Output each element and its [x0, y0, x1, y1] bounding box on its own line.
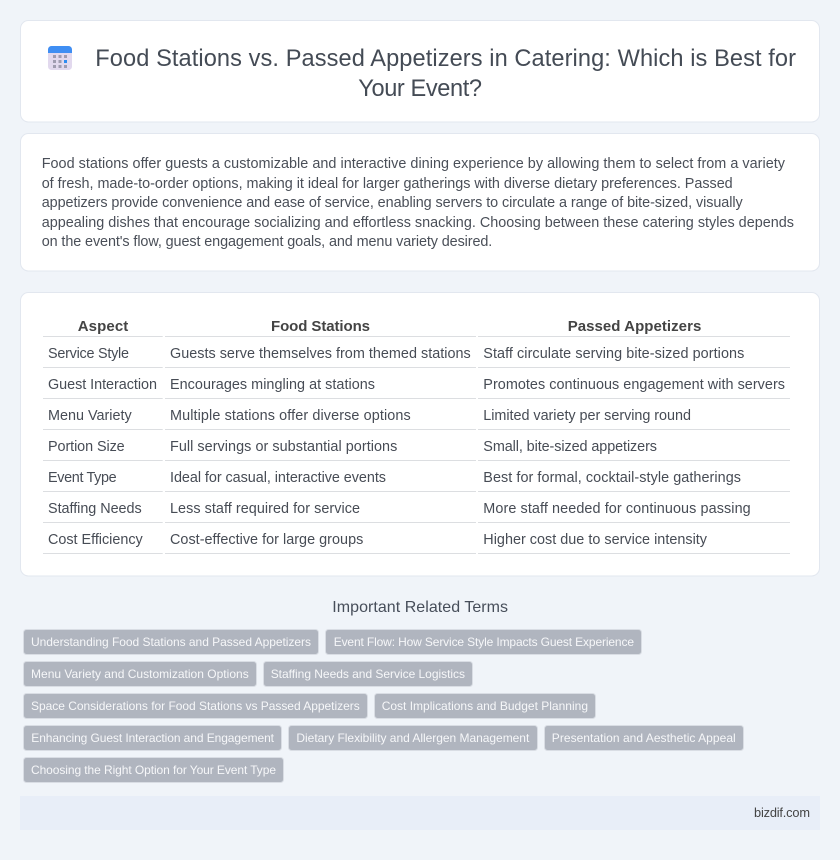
- tag: [24, 726, 282, 750]
- tag: Choosing the Right Option for Your Event Type: [31, 763, 276, 777]
- row: menu variety: Menu Variety: [48, 408, 132, 424]
- tag: [264, 662, 472, 686]
- row: portion size: Full servings or substantial portions: [170, 439, 397, 455]
- text block: summary paragraph: appetizers provide convenience and ease of service, enabling servers to circulate a range of bite-sized, visually: [42, 195, 743, 211]
- tag: Understanding Food Stations and Passed Appetizers: [31, 635, 311, 649]
- row: guest interaction: Encourages mingling at stations: [170, 377, 375, 393]
- heading: related terms: Important Related Terms: [332, 599, 508, 616]
- footer: [20, 796, 820, 830]
- row: menu variety: [48, 408, 691, 424]
- icon: calendar: [48, 46, 72, 70]
- row: staffing needs: More staff needed for continuous passing: [483, 501, 751, 517]
- tag: Staffing Needs and Service Logistics: [271, 667, 465, 681]
- panel: related term tags: [24, 630, 744, 782]
- row: cost efficiency: Cost Efficiency: [48, 532, 143, 548]
- row: event type: Best for formal, cocktail-style gatherings: [483, 470, 741, 486]
- tag: [326, 630, 642, 654]
- text block: summary paragraph: of fresh, made-to-order options, making it ideal for larger gatherings with diverse dietary preferences. Passed: [42, 176, 733, 192]
- row: menu variety: Limited variety per serving round: [483, 408, 691, 424]
- row: service style: [48, 346, 744, 362]
- tag: [24, 758, 284, 782]
- tag: Menu Variety and Customization Options: [31, 667, 249, 681]
- tag: [24, 694, 368, 718]
- tag: Event Flow: How Service Style Impacts Guest Experience: [334, 635, 634, 649]
- table header: [78, 318, 701, 335]
- row: cost efficiency: Higher cost due to service intensity: [483, 532, 708, 548]
- row: portion size: Portion Size: [48, 439, 125, 455]
- tag: [24, 630, 318, 654]
- tag: Dietary Flexibility and Allergen Management: [296, 731, 530, 745]
- row: event type: Ideal for casual, interactive events: [170, 470, 386, 486]
- row: cost efficiency: [48, 532, 708, 548]
- tag: Presentation and Aesthetic Appeal: [552, 731, 736, 745]
- row: staffing needs: [48, 501, 751, 517]
- table header: Passed Appetizers: [568, 318, 701, 335]
- text block: summary paragraph: Food stations offer guests a customizable and interactive dining experience by allowing them to select from a variety: [42, 156, 786, 172]
- text block: summary paragraph: [42, 156, 794, 250]
- tag: Cost Implications and Budget Planning: [382, 699, 588, 713]
- title: [95, 46, 796, 102]
- panel: title card: [20, 20, 820, 122]
- tag: Space Considerations for Food Stations vs Passed Appetizers: [31, 699, 360, 713]
- table header: Food Stations: [271, 318, 370, 335]
- row: portion size: Small, bite-sized appetizers: [483, 439, 657, 455]
- row: guest interaction: [48, 377, 785, 393]
- row: cost efficiency: Cost-effective for large groups: [170, 532, 363, 548]
- tag: Enhancing Guest Interaction and Engagement: [31, 731, 275, 745]
- tag: [374, 694, 596, 718]
- row: guest interaction: Guest Interaction: [48, 377, 157, 393]
- row: event type: [48, 470, 741, 486]
- row: event type: Event Type: [48, 470, 117, 486]
- row: staffing needs: Less staff required for service: [170, 501, 360, 517]
- tag: [24, 662, 256, 686]
- row: service style: Service Style: [48, 346, 129, 362]
- panel: summary text: [20, 134, 820, 271]
- row: menu variety: Multiple stations offer diverse options: [170, 408, 411, 424]
- tag: [288, 726, 538, 750]
- row: staffing needs: Staffing Needs: [48, 501, 142, 517]
- row: guest interaction: Promotes continuous engagement with servers: [483, 377, 785, 393]
- footer: bizdif.com: [754, 805, 810, 820]
- tag: [544, 726, 744, 750]
- text block: summary paragraph: appealing dishes that encourage socializing and effortless snacking. Choosing between these catering styles depends: [42, 215, 794, 231]
- row: service style: Guests serve themselves from themed stations: [170, 346, 471, 362]
- row: service style: Staff circulate serving bite-sized portions: [483, 346, 744, 362]
- text block: summary paragraph: on the event's flow, guest engagement goals, and menu variety desired.: [42, 234, 492, 250]
- title: Food Stations vs. Passed Appetizers in Catering: Which is Best for: [95, 46, 796, 72]
- panel: comparison table: [20, 292, 820, 576]
- title: Your Event?: [358, 76, 482, 102]
- table header: Aspect: [78, 318, 128, 335]
- row: portion size: [48, 439, 657, 455]
